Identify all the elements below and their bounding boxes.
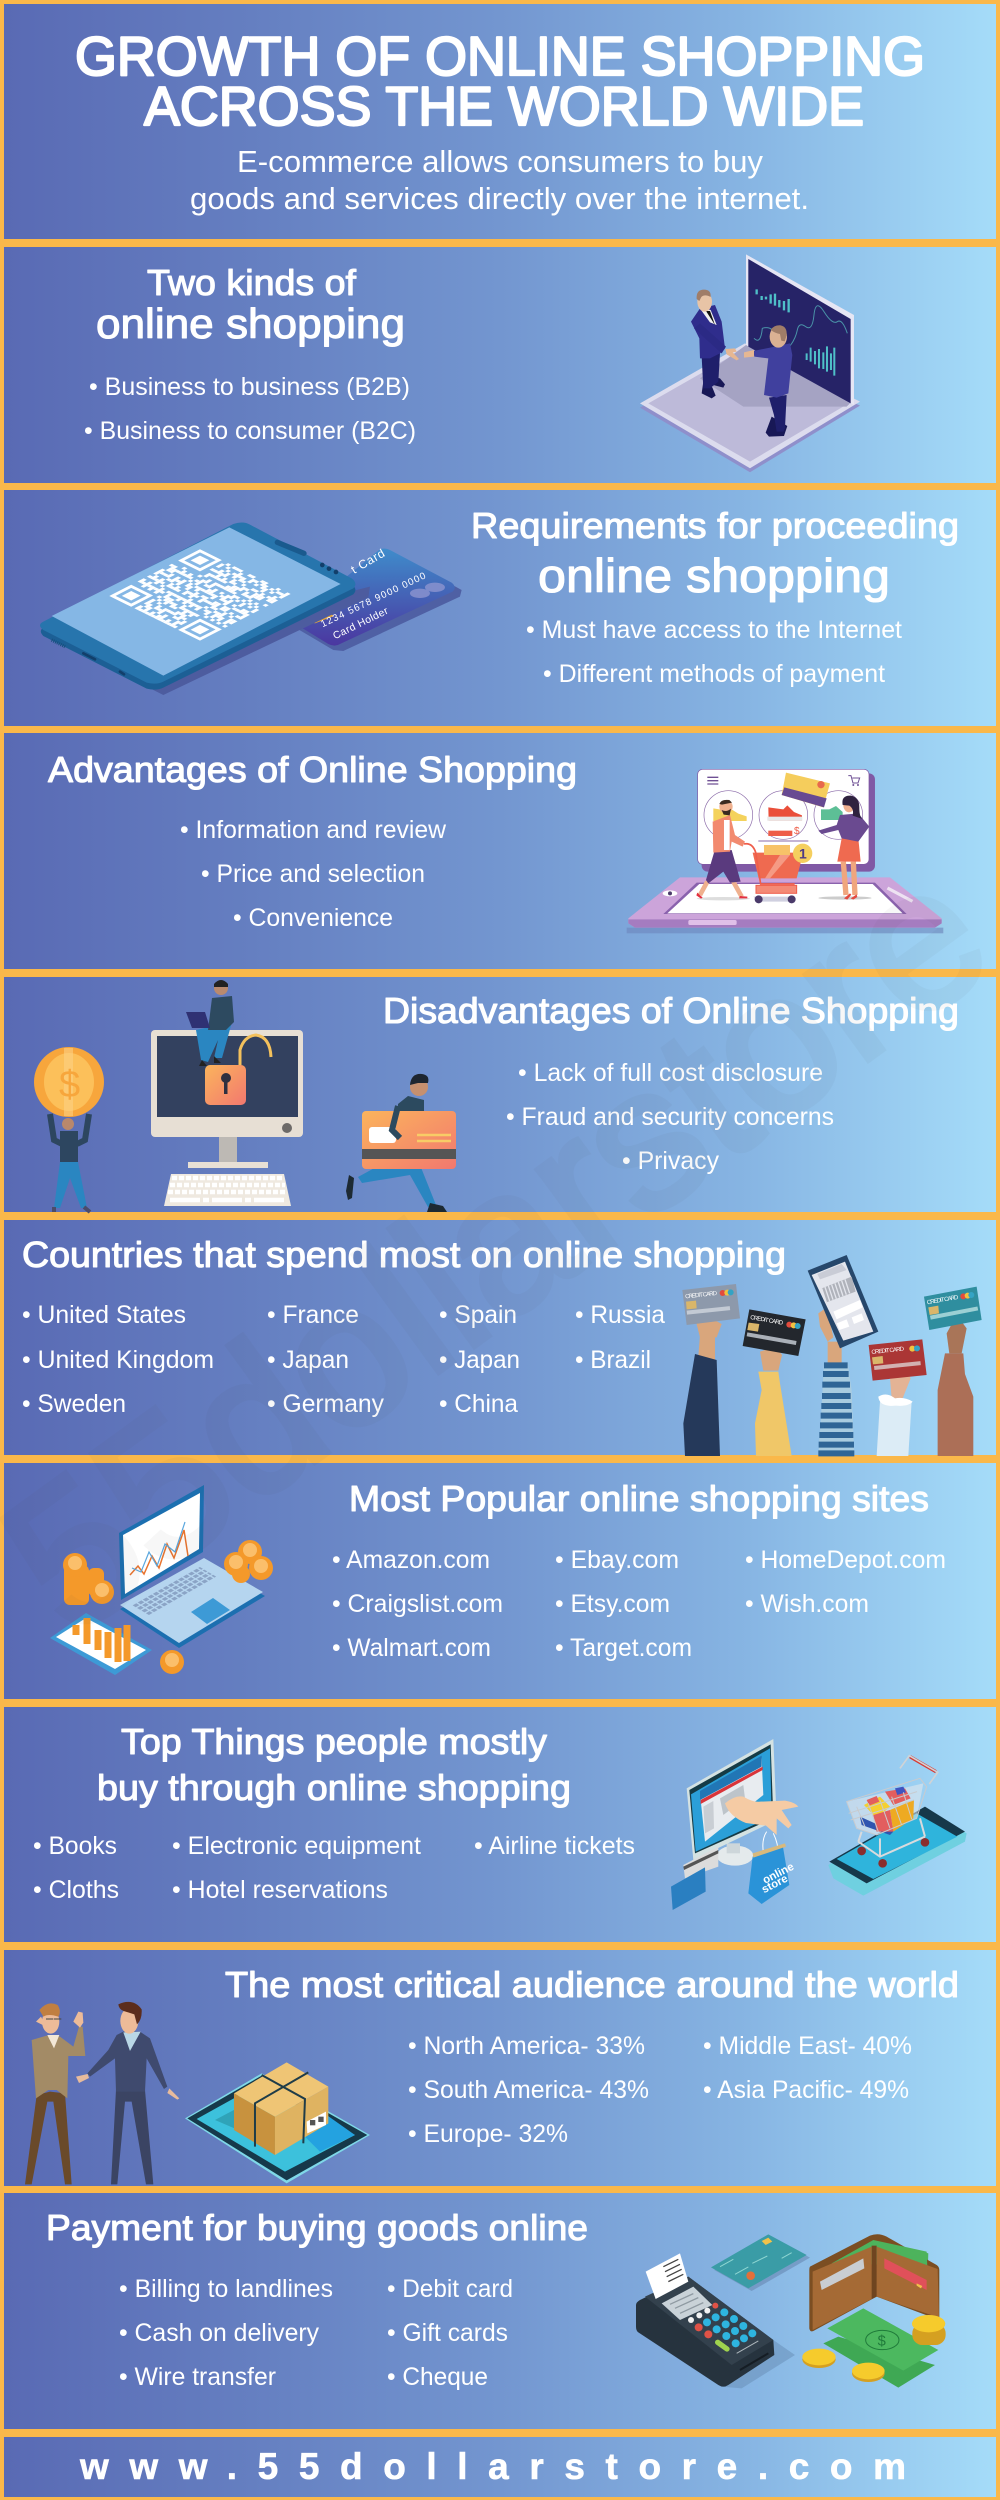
- illustration: shopping on a tablet: $: [794, 826, 800, 837]
- bullet list: • Billing to landlines: [119, 2275, 333, 2303]
- subtitle: E-commerce allows consumers to buy: [237, 144, 763, 179]
- title: GROWTH OF ONLINE SHOPPING: [75, 25, 925, 87]
- site list: • Target.com: [555, 1634, 692, 1662]
- illustration: raised hands with cards: CREDIT CARD: [927, 1295, 959, 1306]
- heading: buy through online shopping: [97, 1767, 571, 1808]
- site list: • HomeDepot.com: [745, 1546, 946, 1574]
- illustration: monitor with hand, bag and cards: online: [761, 1861, 796, 1887]
- panel: popular sites: [4, 1463, 996, 1699]
- heading: Most Popular online shopping sites: [349, 1478, 929, 1519]
- site list: • Ebay.com: [555, 1546, 679, 1574]
- heading: Top Things people mostly: [121, 1721, 547, 1762]
- title: [75, 25, 925, 137]
- bullet list: • Price and selection: [201, 860, 425, 888]
- bullet list: • Wire transfer: [119, 2363, 276, 2391]
- illustration: businessmen shaking hands at a screen: [640, 254, 860, 472]
- heading: [471, 505, 959, 602]
- illustration: two men talking: [25, 2002, 370, 2184]
- statistics list: • South America- 43%: [408, 2076, 649, 2104]
- bullet list: • Cloths: [33, 1876, 119, 1904]
- bullet list: • Gift cards: [387, 2319, 508, 2347]
- site list: • Wish.com: [745, 1590, 869, 1618]
- heading: Disadvantages of Online Shopping: [383, 990, 959, 1031]
- country list: • China: [439, 1390, 518, 1418]
- site list: • Craigslist.com: [332, 1590, 503, 1618]
- panel: header: [4, 4, 996, 239]
- panel: countries: [4, 1220, 996, 1456]
- bullet list: • Must have access to the Internet: [526, 616, 902, 644]
- bullet list: • Convenience: [233, 904, 393, 932]
- illustration: phone with QR code and credit card: Card Holder: [331, 606, 391, 642]
- statistics list: • Asia Pacific- 49%: [703, 2076, 909, 2104]
- bullet list: • Airline tickets: [474, 1832, 635, 1860]
- heading: [96, 262, 405, 347]
- bullet list: • Hotel reservations: [172, 1876, 388, 1904]
- country list: • Brazil: [575, 1346, 651, 1374]
- panel: audience: [4, 1950, 996, 2186]
- heading: [97, 1721, 571, 1808]
- illustration: monitor with hand, bag and cards: store: [760, 1873, 790, 1896]
- heading: Countries that spend most on online shopping: [22, 1234, 786, 1275]
- bullet list: • Cheque: [387, 2363, 488, 2391]
- country list: [22, 1301, 665, 1418]
- bullet list: • Different methods of payment: [543, 660, 885, 688]
- icon: phone with shopping cart: [828, 1756, 967, 1896]
- panel: footer URL: [4, 2437, 996, 2497]
- heading: The most critical audience around the world: [225, 1964, 959, 2005]
- illustration: person holding a coin: $: [59, 1064, 80, 1106]
- illustration: card terminal, card, wallet and cash: $: [878, 2334, 886, 2350]
- illustration: laptop with coins and chart: [50, 1485, 273, 1675]
- illustration: shopping on a tablet: [627, 769, 943, 933]
- illustration: raised hands with cards: [682, 1255, 982, 1456]
- panel: disadvantages: [4, 977, 996, 1212]
- bullet list: [506, 1059, 834, 1175]
- bullet list: • Books: [33, 1832, 117, 1860]
- bullet list: • Information and review: [180, 816, 447, 844]
- site list: • Etsy.com: [555, 1590, 670, 1618]
- country list: • Japan: [439, 1346, 520, 1374]
- bullet list: [526, 616, 902, 688]
- bullet list: [84, 373, 416, 445]
- illustration: shopping on a tablet: 1: [799, 845, 807, 861]
- illustration: phone with QR code and credit card: t Card: [348, 546, 387, 577]
- illustration: raised hands with cards: CREDIT CARD: [685, 1291, 718, 1300]
- heading: online shopping: [96, 300, 405, 347]
- website address: www.55dollarstore.com: [79, 2446, 906, 2487]
- country list: • Sweden: [22, 1390, 126, 1418]
- heading: Advantages of Online Shopping: [48, 749, 577, 790]
- bullet list: • Privacy: [622, 1147, 719, 1175]
- illustration: person holding a coin: [34, 1047, 104, 1212]
- illustration: raised hands with cards: CREDIT CARD: [871, 1347, 905, 1356]
- icon: hacker on monitor: [186, 980, 234, 1066]
- site list: [332, 1546, 946, 1662]
- site list: • Amazon.com: [332, 1546, 490, 1574]
- statistics list: • Middle East- 40%: [703, 2032, 912, 2060]
- country list: • France: [267, 1301, 359, 1329]
- illustration: thief carrying a credit card: [346, 1074, 456, 1212]
- bullet list: • Business to consumer (B2C): [84, 417, 416, 445]
- heading: Requirements for proceeding: [471, 505, 959, 546]
- illustration: phone with QR code and credit card: 1234 5678 9000 0000: [319, 571, 428, 630]
- subtitle: [190, 144, 809, 216]
- statistics list: • North America- 33%: [408, 2032, 645, 2060]
- bullet list: • Fraud and security concerns: [506, 1103, 834, 1131]
- panel: requirements: [4, 490, 996, 726]
- illustration: monitor with hand, bag and cards: [671, 1739, 967, 1910]
- country list: • Spain: [439, 1301, 517, 1329]
- statistics list: [408, 2032, 912, 2148]
- bullet list: [119, 2275, 513, 2391]
- country list: • United States: [22, 1301, 186, 1329]
- panel: advantages: [4, 733, 996, 969]
- illustration: phone with QR code and credit card: [40, 522, 462, 695]
- panel: payment: [4, 2193, 996, 2429]
- heading: Two kinds of: [147, 262, 357, 303]
- bullet list: • Electronic equipment: [172, 1832, 421, 1860]
- bullet list: • Cash on delivery: [119, 2319, 319, 2347]
- heading: Payment for buying goods online: [46, 2207, 588, 2248]
- illustration: raised hands with cards: CREDIT CARD: [750, 1315, 784, 1327]
- illustration: card terminal, card, wallet and cash: [636, 2234, 946, 2388]
- country list: • United Kingdom: [22, 1346, 214, 1374]
- subtitle: goods and services directly over the internet.: [190, 181, 809, 216]
- bullet list: • Business to business (B2B): [89, 373, 410, 401]
- site list: • Walmart.com: [332, 1634, 491, 1662]
- heading: online shopping: [538, 549, 890, 602]
- country list: • Russia: [575, 1301, 665, 1329]
- statistics list: • Europe- 32%: [408, 2120, 568, 2148]
- bullet list: [180, 816, 447, 932]
- panel: two kinds of online shopping: [4, 247, 996, 483]
- panel: top things: [4, 1707, 996, 1942]
- bullet list: • Debit card: [387, 2275, 513, 2303]
- illustration: monitor with open padlock: [151, 980, 303, 1206]
- title: ACROSS THE WORLD WIDE: [144, 75, 864, 137]
- bullet list: • Lack of full cost disclosure: [518, 1059, 823, 1087]
- country list: • Japan: [267, 1346, 349, 1374]
- bullet list: [33, 1832, 635, 1904]
- country list: • Germany: [267, 1390, 384, 1418]
